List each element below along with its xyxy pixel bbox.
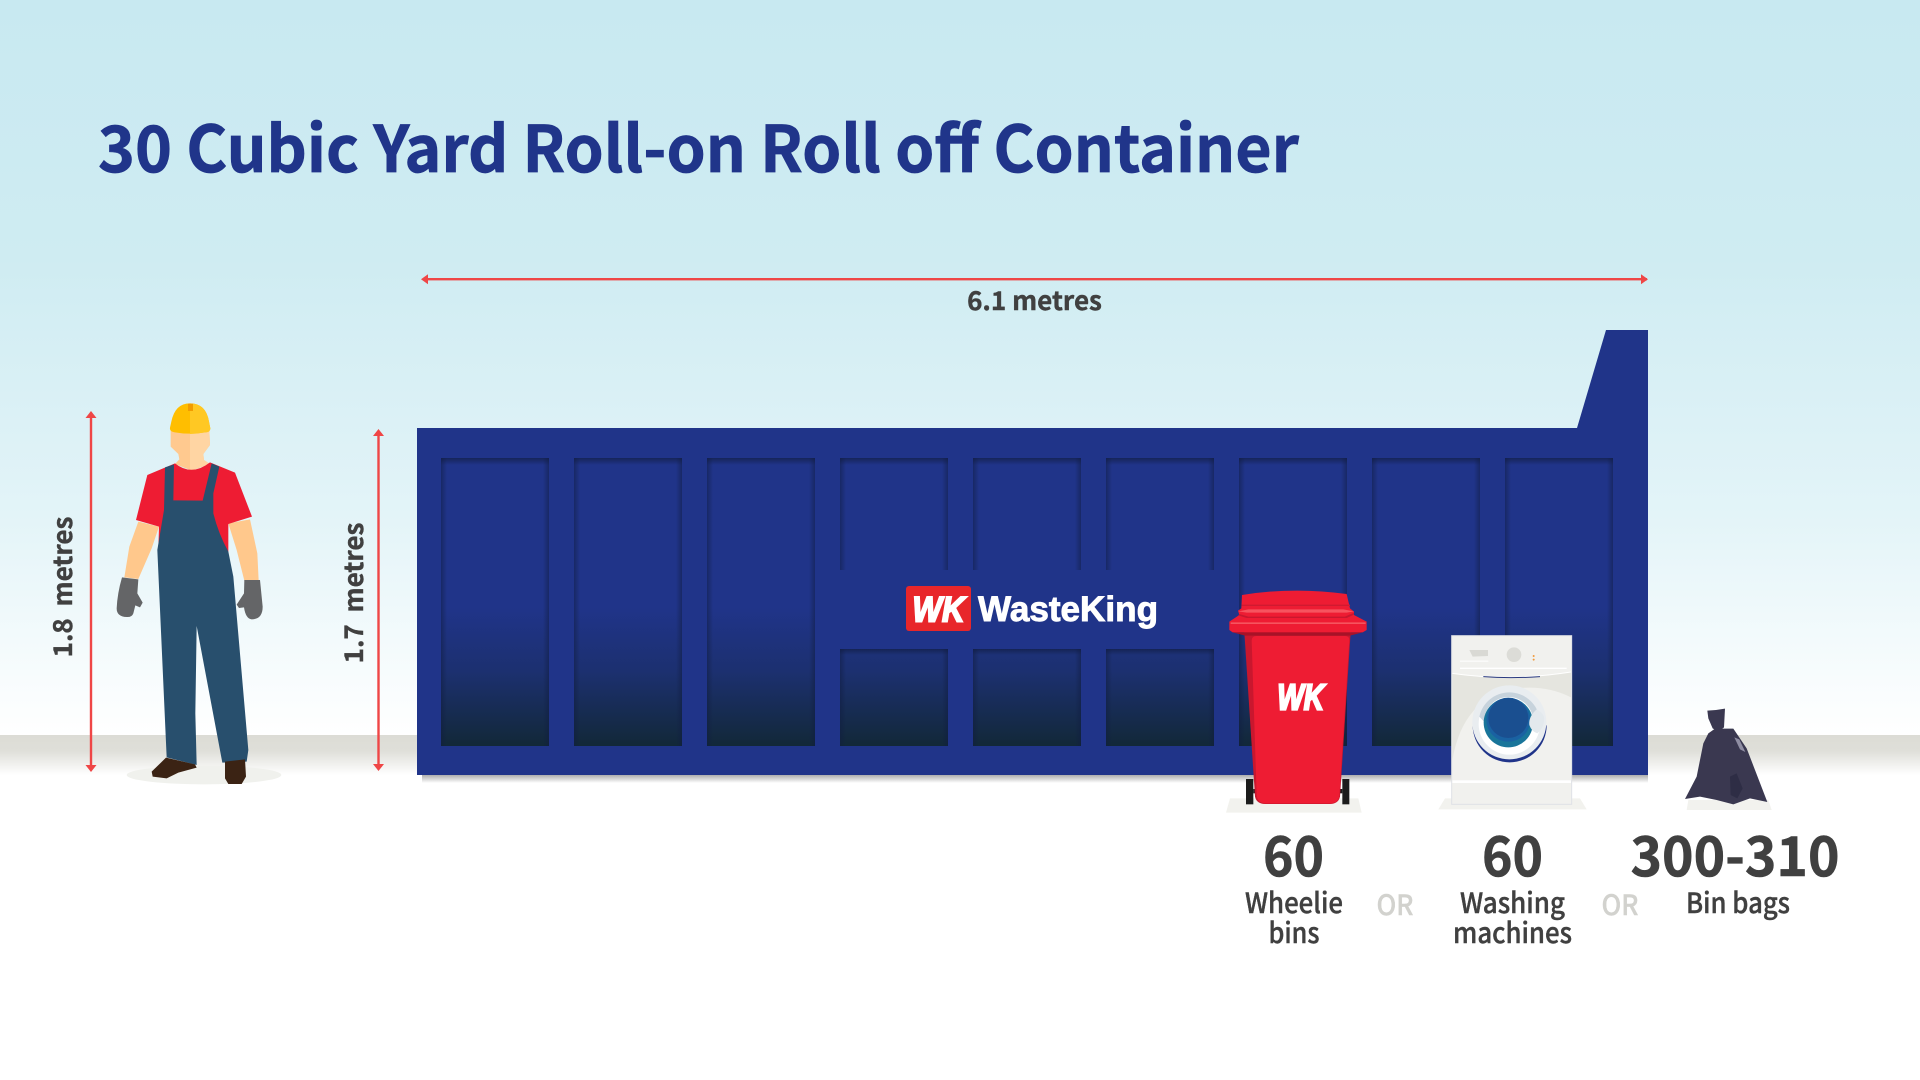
head	[171, 430, 210, 471]
capacity: washing machines	[1453, 812, 1572, 952]
tied neck	[1707, 709, 1725, 732]
capacity: washing machines: 60	[1482, 812, 1543, 892]
WasteKing logo	[906, 586, 1158, 631]
label: 6.1 metres: 6.1 metres	[967, 281, 1102, 318]
body	[1452, 636, 1572, 804]
shoes	[152, 758, 246, 784]
ground band	[0, 735, 1920, 775]
shadow	[127, 766, 281, 784]
capacity: bin bags: Bin bags	[1686, 882, 1790, 922]
wheels	[1246, 779, 1349, 804]
capacity: washing machines: Washing	[1460, 882, 1565, 922]
capacity: wheelie bins: bins	[1268, 912, 1320, 952]
hard hat	[170, 403, 210, 434]
label: 1.7 metres: 1.7 metres	[334, 523, 371, 663]
roll-on roll-off container	[417, 330, 1648, 783]
WasteKing logo: WK	[912, 590, 967, 630]
container shadow	[422, 775, 1648, 783]
body	[1244, 632, 1351, 804]
title: 30 Cubic Yard Roll-on Roll off Container	[98, 99, 1299, 191]
WasteKing logo: WasteKing	[978, 590, 1158, 629]
capacity: wheelie bins: 60	[1263, 812, 1324, 892]
shadow	[1687, 800, 1772, 810]
shadow	[1438, 798, 1587, 809]
arrow: person height	[86, 411, 96, 772]
capacity: washing machines: machines	[1453, 912, 1572, 952]
capacity: bin bags: 300-310	[1630, 812, 1840, 892]
bin bag	[1685, 709, 1772, 810]
label: 1.8 metres: 1.8 metres	[43, 517, 80, 657]
door handle	[1529, 709, 1544, 733]
front shade	[1452, 672, 1571, 760]
logo band	[830, 570, 1224, 655]
washing machine	[1438, 636, 1587, 809]
sky background	[0, 0, 1920, 736]
overalls	[157, 463, 248, 765]
sack	[1685, 729, 1767, 804]
arrow: container height	[373, 429, 384, 771]
shadow	[1226, 798, 1362, 813]
OR separator: OR	[1376, 884, 1414, 924]
door	[1473, 725, 1547, 762]
gloves	[117, 577, 263, 619]
lid	[1229, 591, 1367, 632]
container body	[417, 330, 1648, 775]
controls	[1469, 650, 1488, 657]
wheelie bin	[1226, 591, 1367, 813]
capacity: wheelie bins	[1245, 812, 1343, 952]
corrugated panels	[441, 458, 1613, 746]
drum	[1484, 698, 1533, 747]
OR separator: OR	[1602, 884, 1638, 924]
worker figure	[117, 403, 281, 784]
shirt	[136, 462, 252, 552]
capacity: wheelie bins: Wheelie	[1245, 882, 1343, 922]
arrow: container length	[421, 274, 1648, 284]
WK mark: WK	[1277, 676, 1326, 717]
arms	[124, 519, 259, 581]
